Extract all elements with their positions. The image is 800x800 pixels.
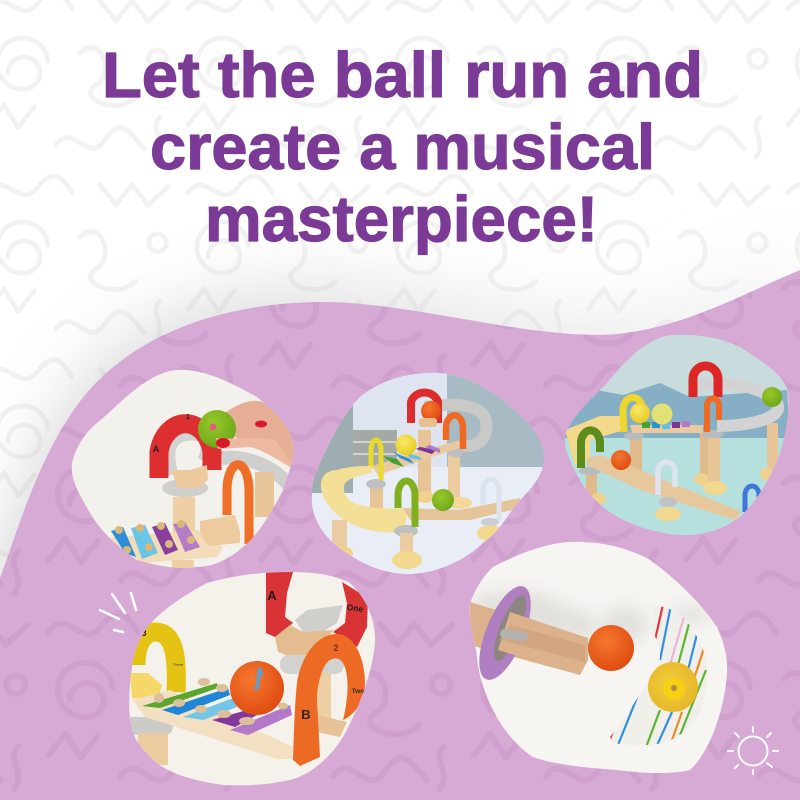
sparkle lines	[100, 593, 136, 632]
yellow curved track	[321, 466, 407, 533]
orange arch	[227, 465, 249, 544]
xylophone bars	[111, 520, 200, 559]
yellow balls	[630, 403, 672, 424]
gray ramp ring	[168, 433, 202, 476]
purple ring	[469, 580, 588, 686]
gray curved track	[697, 383, 778, 426]
xylophone bars	[142, 683, 292, 735]
orange ball with note	[230, 661, 284, 715]
back walls	[305, 365, 547, 493]
gray holder right	[280, 655, 344, 674]
letter B: B	[301, 707, 311, 722]
yellow ball	[396, 434, 416, 456]
white arch base	[655, 497, 681, 521]
photo blob: top view of bell and ball	[465, 535, 735, 780]
orange arch	[446, 415, 463, 449]
white arch	[483, 479, 499, 520]
arch number: 2	[333, 643, 339, 653]
white arch	[658, 462, 675, 495]
soft shadows	[475, 590, 710, 643]
arch word: Three	[173, 662, 184, 667]
wood track	[587, 455, 742, 520]
plank	[372, 440, 462, 475]
red nails	[216, 420, 267, 448]
plank	[630, 425, 703, 433]
green ball	[198, 410, 236, 448]
purple wave panel	[0, 270, 800, 800]
gray ramp	[295, 605, 343, 635]
arch number: 1	[186, 414, 190, 421]
orange arch	[707, 398, 719, 432]
yellow arch	[371, 440, 381, 480]
gray track	[222, 458, 292, 490]
wood track	[470, 602, 588, 675]
ball note mark	[210, 424, 216, 430]
soft shadow along the purple wave	[0, 251, 800, 786]
red arch	[159, 424, 212, 478]
green ball	[432, 489, 454, 511]
wooden pillar	[173, 497, 195, 532]
red arch left	[266, 572, 293, 637]
title: masterpiece!	[205, 183, 598, 255]
wood track	[403, 498, 520, 520]
yellow track	[565, 416, 625, 465]
right wood track	[317, 715, 347, 737]
yellow track piece	[130, 673, 162, 700]
hand back	[225, 401, 296, 470]
xylophone bars	[642, 421, 690, 429]
gray holder	[125, 717, 173, 735]
photo blob: hand placing green ball on track	[72, 370, 294, 568]
title: Let the ball run and	[102, 39, 703, 111]
aqua floor	[560, 438, 795, 540]
gray curved track	[425, 405, 486, 446]
arch letter: A	[153, 444, 160, 454]
wood blocks	[200, 515, 240, 546]
xylophone pegs	[154, 678, 288, 725]
orange ball	[421, 401, 441, 421]
title: create a musical	[150, 111, 655, 183]
yellow bell	[648, 662, 698, 712]
xylophone bars	[383, 445, 440, 467]
wood board	[133, 690, 293, 759]
blue hill	[560, 383, 790, 440]
thumb	[216, 438, 292, 467]
front pillars	[327, 518, 503, 569]
wooden holder	[419, 418, 437, 427]
orange arch	[293, 634, 365, 766]
title	[102, 39, 703, 255]
yellow arch	[623, 397, 642, 432]
orange ball	[611, 450, 631, 470]
red arch right	[333, 582, 368, 647]
sun icon	[728, 727, 778, 774]
gray holder	[162, 479, 208, 497]
green ball	[762, 387, 782, 407]
wood pillar	[313, 673, 331, 721]
orange ball	[588, 625, 634, 671]
yellow arch	[136, 632, 176, 692]
red arch	[411, 392, 438, 423]
wooden leg	[138, 733, 168, 765]
blue arch	[745, 486, 759, 512]
lower pillar	[172, 560, 194, 568]
rear wooden pillar	[255, 472, 274, 517]
red arch	[693, 366, 718, 397]
wood board	[105, 530, 223, 563]
arch number: 3	[141, 628, 147, 638]
back pillars	[366, 430, 472, 515]
photo blob: aqua scene	[560, 330, 795, 540]
photo blob: xylophone close-up with orange ball	[125, 565, 380, 790]
pillars	[579, 423, 778, 505]
wood chunk	[171, 465, 208, 488]
word Two: Two	[352, 688, 364, 695]
letter A: A	[267, 588, 277, 603]
word One: One	[346, 602, 364, 614]
metal clip	[499, 628, 529, 642]
wood wheel	[275, 625, 333, 658]
striped crescent	[600, 600, 715, 750]
photo blob: yellow curved track scene	[312, 372, 544, 574]
green arch	[581, 430, 600, 468]
green arch	[398, 481, 415, 527]
